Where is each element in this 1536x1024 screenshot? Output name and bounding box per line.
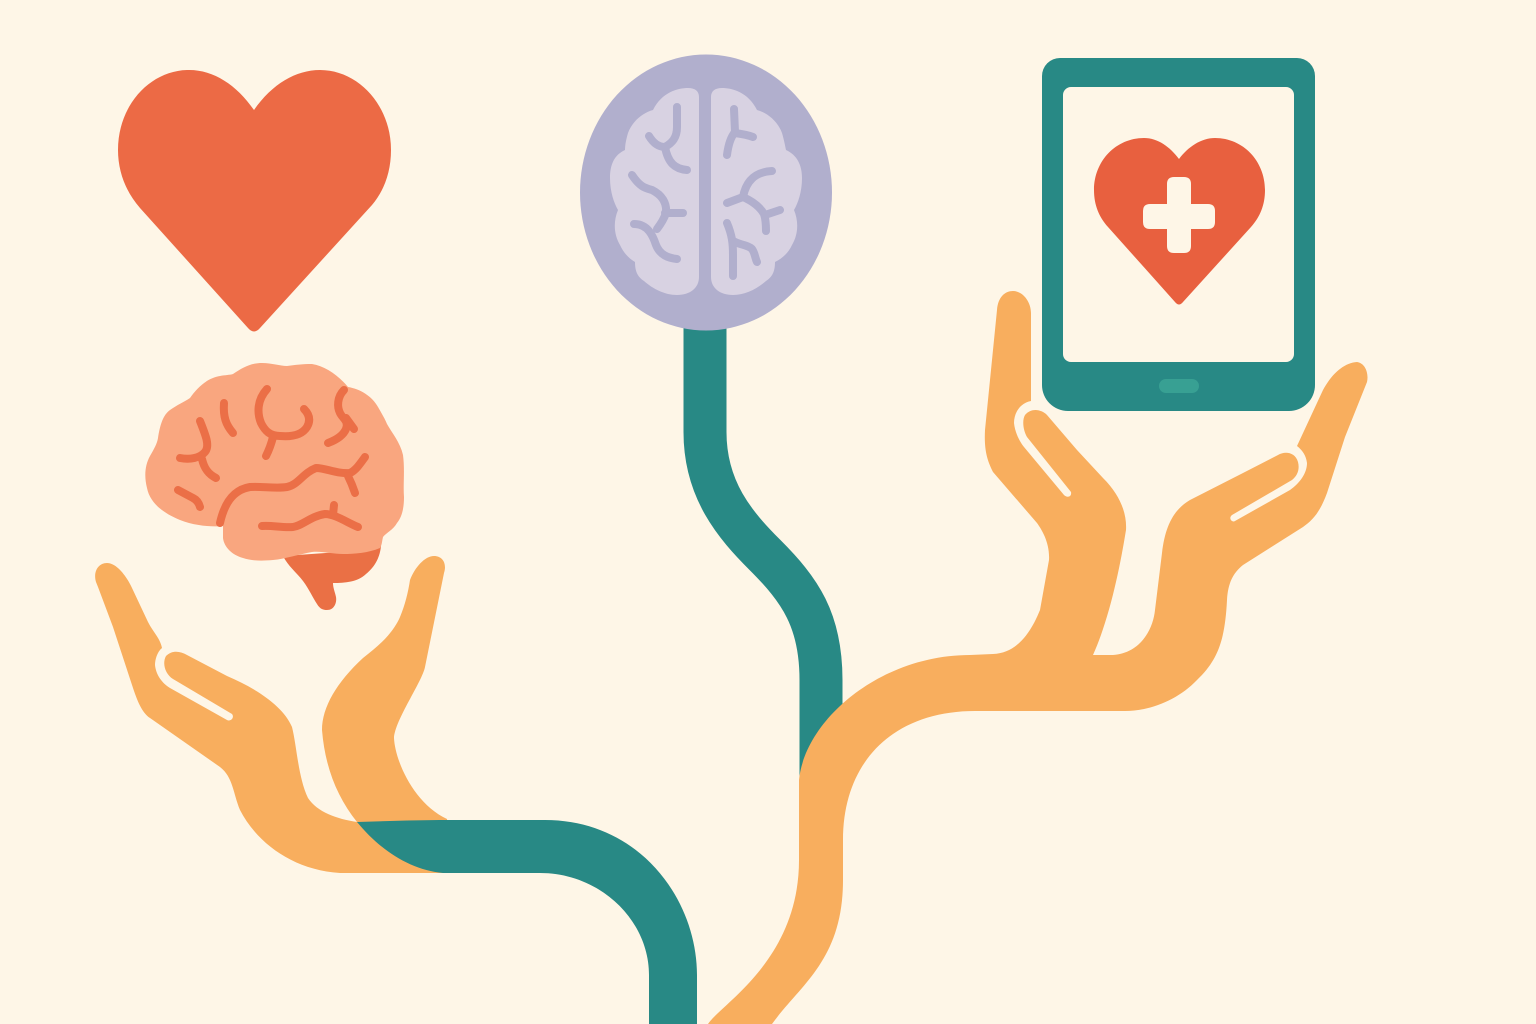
left hand with thumb bbox=[95, 563, 450, 873]
teal stem from lavender brain bbox=[705, 320, 821, 790]
icon: tablet with medical heart bbox=[1042, 58, 1315, 411]
cerebrum bbox=[145, 363, 404, 561]
icon: side-view coral brain bbox=[145, 363, 404, 610]
icon: lavender brain in circle bbox=[580, 54, 832, 330]
cerebellum bbox=[283, 546, 381, 610]
lavender circle bbox=[580, 54, 832, 330]
icon: large heart bbox=[118, 70, 391, 332]
small heart bbox=[1094, 138, 1265, 304]
right hand on left pair bbox=[322, 556, 450, 850]
lavender brain folds bbox=[632, 107, 780, 276]
left hemisphere bbox=[610, 88, 699, 295]
tablet home button bbox=[1159, 379, 1199, 393]
medical cross bbox=[1143, 177, 1215, 253]
right hemisphere bbox=[711, 88, 802, 295]
orange ribbon and hands holding tablet bbox=[708, 291, 1368, 1024]
tablet screen bbox=[1063, 87, 1294, 362]
tablet body bbox=[1042, 58, 1315, 411]
brain folds bbox=[178, 389, 365, 527]
teal ribbon under left hands bbox=[357, 820, 697, 1024]
left caring hands bbox=[95, 556, 450, 873]
